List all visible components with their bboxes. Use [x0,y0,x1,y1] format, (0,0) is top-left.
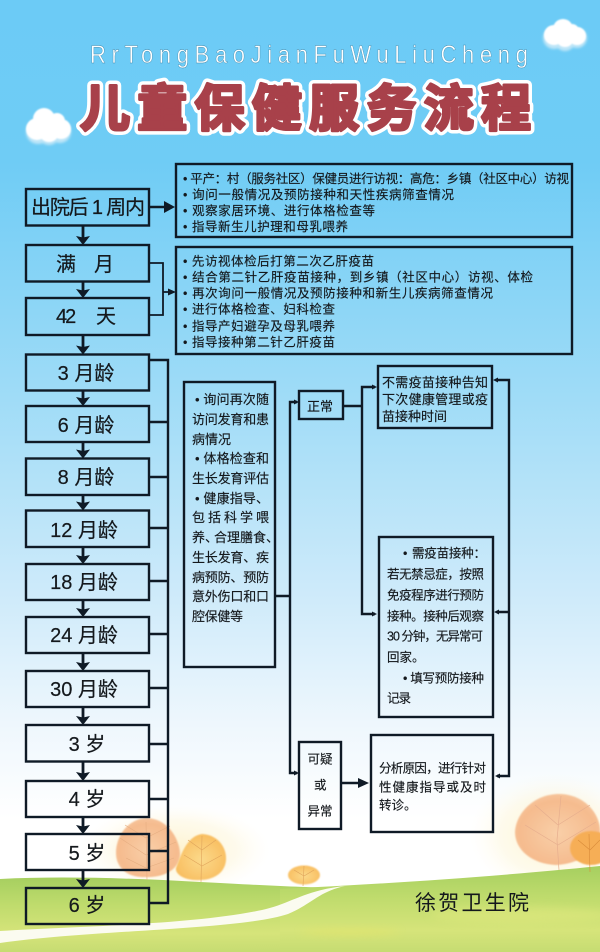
panel: follow-up content: 病情况 [192,432,231,447]
tree: small centre [288,866,320,886]
box: 42天: 42 天 [56,306,116,328]
box: 24月龄: 24 月龄 [50,624,118,647]
panel: follow-up content: 腔保健等 [192,609,243,624]
box: 5岁 [26,834,149,870]
box: 满月 [26,245,149,282]
subtitle: pinyin: RrTongBaoJianFuWuLiuCheng [90,42,528,69]
box: 5岁: 5 岁 [69,842,105,865]
box: normal result: 正常 [307,399,333,414]
panel: vaccine needed [379,537,493,717]
box: 24月龄 [26,617,149,653]
panel: full-month and 42-day details: • 结合第二针乙肝疫苗接种，到乡镇（社区中心）访视、体检 [183,270,533,284]
box: suspicious or abnormal: 异常 [308,804,332,818]
icon: cloud top right [543,19,587,51]
tree: amber left [176,834,226,882]
panel: vaccine needed: 若无禁忌症，按照 [387,566,484,582]
panel: full-month and 42-day details: • 再次询问一般情况及预防接种和新生儿疾病筛查情况 [183,286,493,300]
connector: normal to outcomes [343,384,377,616]
box: suspicious or abnormal [299,742,341,829]
panel: no vaccine needed: 苗接种时间 [382,409,447,424]
box: 18月龄: 18 月龄 [50,571,118,594]
tree: peach left [116,818,180,880]
panel: follow-up content [184,382,279,667]
panel: analysis and guidance [371,735,493,832]
box: suspicious or abnormal: 或 [314,778,327,792]
box: 30月龄 [26,671,149,707]
connector: timeline bus [149,360,168,903]
box: 30月龄: 30 月龄 [50,678,118,701]
box: 满月: 满 月 [56,253,114,276]
arrow: abnormal to analysis [341,778,369,788]
box: 6岁 [26,888,149,924]
panel: follow-up content: 养、合理膳食、 [192,530,279,545]
box: 4岁 [26,781,149,817]
panel: no vaccine needed [378,366,492,428]
panel: follow-up content: 病预防、预防 [192,570,269,585]
panel: analysis and guidance: 分析原因，进行针对 [379,760,486,776]
box: 8月龄: 8 月龄 [58,466,114,489]
connector: return bus on right [493,378,509,778]
panel: vaccine needed: • 填写预防接种 [403,670,484,686]
box: 4岁: 4 岁 [69,788,105,811]
box: 12月龄 [26,510,149,547]
box: 6月龄: 6 月龄 [58,414,114,437]
box: 8月龄 [26,458,149,495]
tree: large peach right [515,794,600,870]
panel: follow-up content: • 询问再次随 [195,392,269,407]
arrow: full-month and 42-day to detail panel [149,263,176,315]
panel: timeline boxes [26,189,149,924]
panel: follow-up content: 生长发育评估 [192,471,269,486]
panel: follow-up content: 访问发育和患 [192,412,269,427]
panel: full-month and 42-day details: • 进行体格检查、妇科检查 [183,302,335,316]
panel: first week details: • 询问一般情况及预防接种和天性疾病筛查情况 [183,187,454,202]
box: 18月龄 [26,564,149,600]
panel: full-month and 42-day details [176,247,572,354]
panel: no vaccine needed: 下次健康管理或疫 [382,392,488,407]
text: hospital name: 徐贺卫生院 [415,892,529,915]
box: 3岁 [26,725,149,762]
box: 出院后1周内 [26,189,149,226]
box: suspicious or abnormal: 可疑 [308,752,333,766]
panel: first week details: • 指导新生儿护理和母乳喂养 [183,219,348,234]
panel: first week details: • 观察家居环境、进行体格检查等 [183,203,375,218]
title: 儿童保健服务流程 [80,69,531,141]
panel: follow-up content: 包括科学喂 [192,510,269,525]
box: 出院后1周内: 出院后 1 周内 [31,196,145,219]
box: 6月龄 [26,406,149,442]
panel: analysis and guidance: 性健康指导或及时 [379,780,486,794]
panel: follow-up content: • 健康指导、 [195,491,269,506]
panel: follow-up content: 生长发育、疾 [192,550,269,565]
box: normal result [299,391,343,419]
panel: vaccine needed: 免疫程序进行预防 [387,588,484,602]
panel: follow-up content: 意外伤口和口 [192,589,269,604]
panel: follow-up content: • 体格检查和 [195,451,269,466]
box: 3月龄 [26,354,149,390]
panel: analysis and guidance: 转诊。 [379,798,417,812]
panel: full-month and 42-day details: • 指导产妇避孕及母乳喂养 [183,318,335,334]
connector: content to results [275,400,299,776]
box: 3月龄: 3 月龄 [58,362,114,385]
panel: first week details: • 平产：村（服务社区）保健员进行访视：高危：乡镇（社区中心）访视 [183,171,569,186]
panel: vaccine needed: 接种。接种后观察 [387,608,484,624]
panel: full-month and 42-day details: • 指导接种第二针乙肝疫苗 [183,334,335,350]
panel: full-month and 42-day details: • 先访视体检后打第二次乙肝疫苗 [183,254,374,268]
title: 儿童保健服务流程 [80,69,531,141]
box: 3岁: 3 岁 [69,733,105,756]
panel: vaccine needed: •需疫苗接种： [403,546,486,560]
box: 12月龄: 12 月龄 [50,519,118,542]
arrow: first visit to detail panel [149,201,175,213]
panel: first week details [176,164,572,237]
panel: vaccine needed: 30 分钟，无异常可 [387,628,483,644]
tree: small orange right [570,831,600,872]
icon: cloud left [26,108,71,145]
box: 6岁: 6 岁 [69,894,105,917]
background: meadow with trees and road [0,773,600,952]
panel: vaccine needed: 记录 [387,692,411,706]
panel: no vaccine needed: 不需疫苗接种告知 [382,375,488,390]
box: 42天 [26,298,149,335]
arrows: down between timeline boxes [76,226,90,888]
panel: vaccine needed: 回家。 [387,650,425,664]
